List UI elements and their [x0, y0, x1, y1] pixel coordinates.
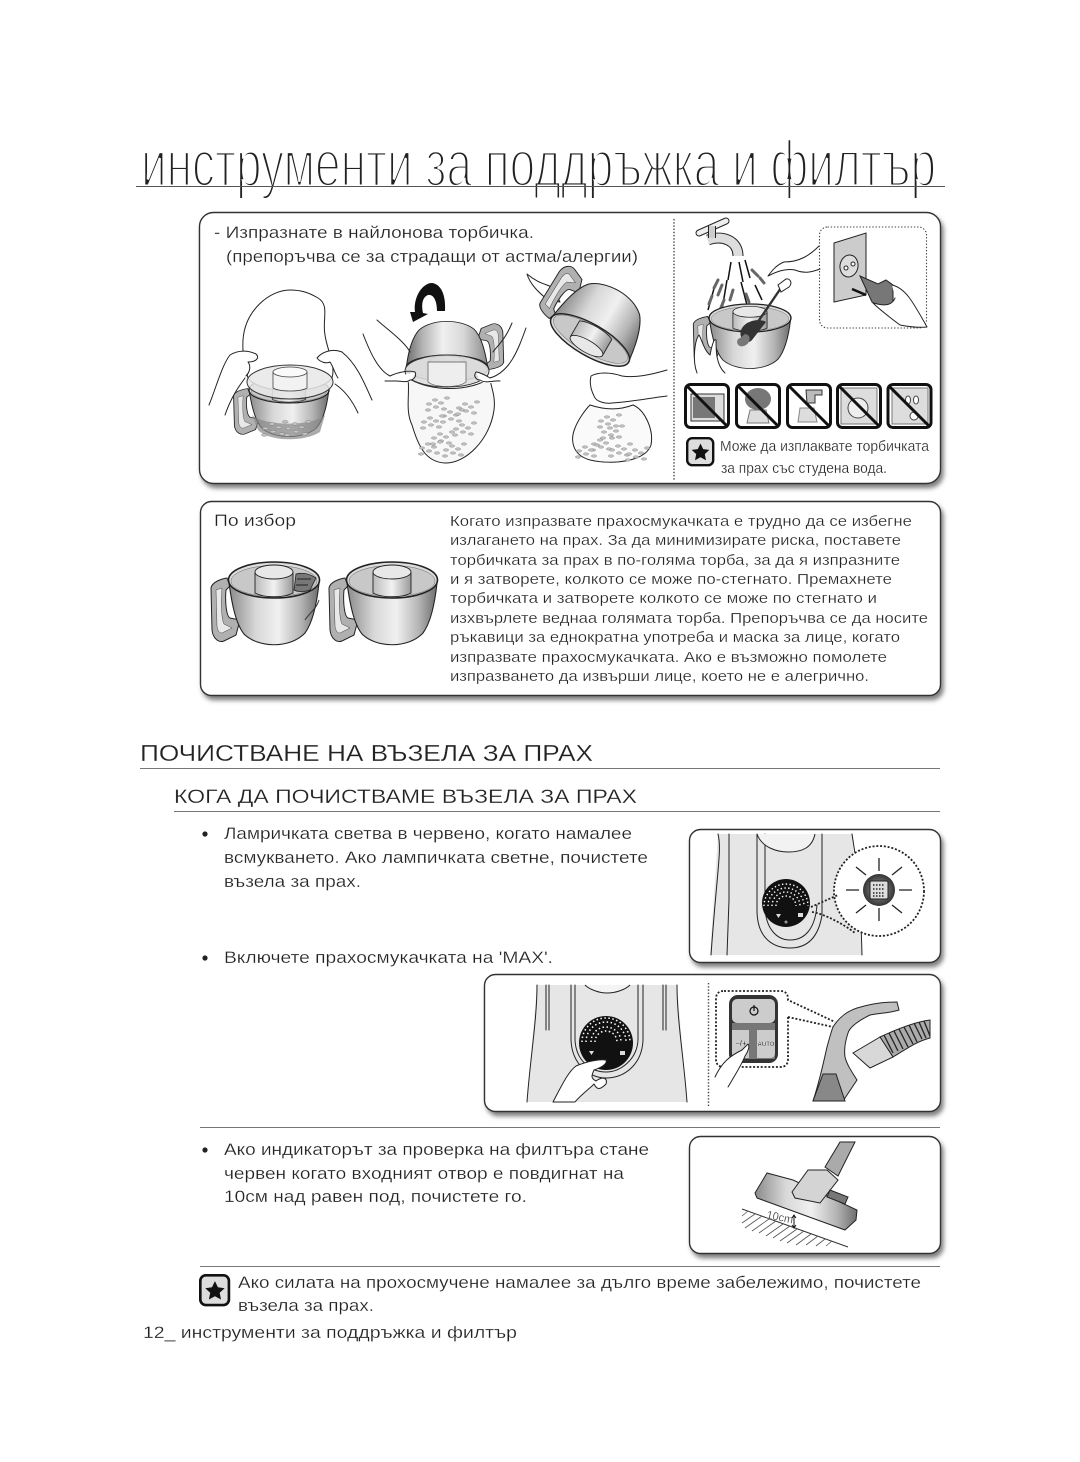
panel: emptying into a plastic bag: [200, 212, 940, 484]
text block: lamp turns red: Ламричката светва в червено, когато намалее: [224, 824, 632, 843]
safety text: изпразването да извърши лице, което не е алегрично.: [450, 669, 869, 685]
note: rinse the bag: [687, 438, 930, 477]
illustration: hose handle: [813, 1002, 930, 1101]
heading: ПОЧИСТВАНЕ НА ВЪЗЕЛА ЗА ПРАХ: [140, 740, 593, 766]
safety text: излагането на прах. За да минимизирате риска, поставете: [450, 533, 901, 549]
text block: lamp turns red: възела за прах.: [224, 872, 361, 891]
callout: control buttons on the handle: AUTO: [758, 1042, 775, 1048]
instruction text: - Изпразнате в найлонова торбичка.: [214, 223, 534, 242]
illustration: bowl with compartment: [211, 562, 320, 645]
safety text: [450, 514, 928, 685]
callout: control buttons on the handle: –/+: [735, 1039, 747, 1048]
divider rule: [200, 1126, 940, 1128]
safety text: изхвърлете веднаа голямата торба. Препоръчва се да носите: [450, 611, 928, 627]
subheading: КОГА ДА ПОЧИСТВАМЕ ВЪЗЕЛА ЗА ПРАХ: [174, 787, 637, 808]
safety text: торбичката и затворете колкото се може по стегнато и: [450, 591, 877, 607]
text block: filter check indicator: Ако индикаторът за проверка на филтъра стане: [224, 1140, 649, 1159]
icon: star note: [200, 1275, 229, 1305]
callout: control buttons on the handle: [715, 991, 835, 1087]
illustration: bag held over the bowl: [209, 290, 372, 439]
callout: pull the plug from the socket: [820, 227, 927, 328]
safety text: изпразвате прахосмукачката. Ако е възможно помолете: [450, 650, 887, 666]
icon: no washing machine: [838, 384, 880, 428]
divider: [708, 983, 710, 1106]
panel: optional bowls: [200, 502, 940, 696]
illustration: bowl turned upside down into the bag: [363, 320, 526, 463]
note: clean the dust unit: възела за прах.: [238, 1296, 374, 1315]
divider: [673, 219, 675, 480]
callout: magnified indicator: [811, 846, 924, 936]
instruction text: (препоръчва се за страдащи от астма/алергии): [226, 247, 638, 266]
icon: no tap washing: [788, 384, 830, 428]
note: rinse the bag: за прах със студена вода.: [721, 460, 887, 477]
illustration: vacuum body with lit indicator: [710, 834, 862, 955]
illustration: floor brush over the floor: [755, 1142, 857, 1230]
note: clean the dust unit: [200, 1273, 921, 1315]
text block: lamp turns red: всмукването. Ако лампичката светне, почистете: [224, 848, 648, 867]
label: По избор: [214, 511, 296, 530]
illustration: pouring from tilted bowl into the bag: [527, 260, 667, 462]
note: rinse the bag: Може да изплаквате торбичката: [720, 438, 930, 455]
instruction text: [214, 223, 638, 266]
illustration: rinsing the bowl under a tap: [693, 221, 820, 373]
text block: filter check indicator: 10см над равен под, почистете го.: [224, 1187, 527, 1206]
footer: 12_ инструменти за поддръжка и филтър: [143, 1323, 517, 1342]
floor hatch: [742, 1209, 848, 1247]
icon: rotate arrow: [410, 283, 445, 322]
measurement label: 10cm: [765, 1209, 794, 1227]
panel: indicator lamp: [690, 830, 940, 962]
note: clean the dust unit: Ако силата на прохосмучене намалее за дълго време забележимо, почистете: [238, 1273, 921, 1292]
panel: set power to MAX: [484, 974, 940, 1112]
text block: switch to MAX: Включете прахосмукачката на 'MAX'.: [224, 948, 553, 967]
text block: filter check indicator: червен когато входният отвор е повдигнат на: [224, 1164, 625, 1183]
illustration: pressing the body button: [527, 985, 687, 1102]
icon: no dishwasher: [888, 384, 931, 428]
prohibition icons: [686, 384, 931, 428]
text block: lamp turns red: [202, 824, 648, 891]
illustration: bowl without compartment: [329, 562, 438, 645]
icon: star note: [687, 438, 713, 465]
safety text: Когато изпразвате прахосмукачката е трудно да се избегне: [450, 514, 912, 530]
safety text: торбичката за прах в по-голяма торба, за да я изпразните: [450, 553, 900, 569]
divider rule: [200, 1266, 940, 1268]
panel: brush raised 10cm: [690, 1136, 940, 1254]
icon: no microwave: [686, 384, 728, 428]
safety text: и я затворете, колкото се може по-стегнато. Премахнете: [450, 572, 892, 588]
icon: no tumble drying: [736, 384, 780, 428]
safety text: ръкавици за еднократна употреба и маска за лице, когато: [450, 630, 900, 646]
text block: filter check indicator: [202, 1140, 649, 1206]
